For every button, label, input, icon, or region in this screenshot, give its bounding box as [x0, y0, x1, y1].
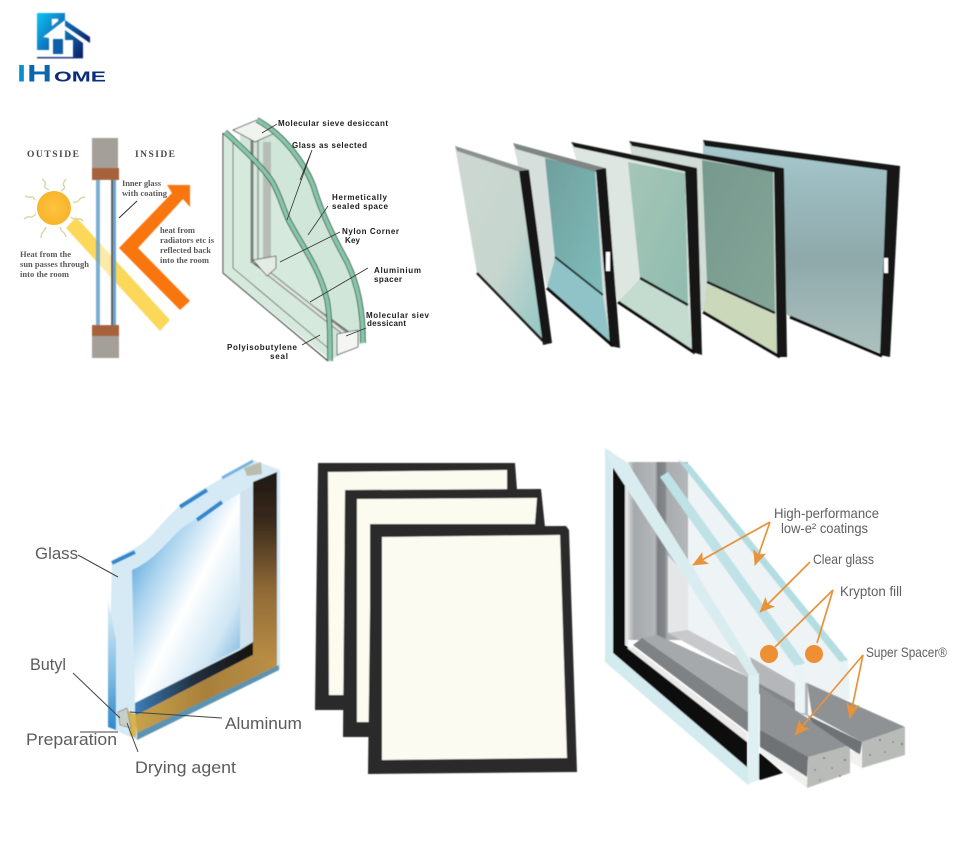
label: polyisobutylene seal: seal: [270, 352, 288, 361]
frame 3: [368, 526, 577, 774]
label: drying agent: Drying agent: [135, 758, 236, 777]
window illustration: [605, 448, 850, 785]
label: molecular sieve dessicant: dessicant: [367, 319, 406, 328]
glass unit 1: [455, 146, 552, 345]
logo wordmark: [17, 60, 106, 88]
labels: outside inside: [27, 150, 175, 160]
label: krypton fill: Krypton fill: [840, 583, 902, 599]
icon: sun: [24, 179, 85, 238]
label: super spacer: Super Spacer®: [866, 644, 948, 660]
reflected heat arrow: [119, 185, 190, 310]
panel: sealed unit cutaway: [223, 119, 444, 361]
glass unit 5: [703, 140, 900, 357]
panel: triple-pane window section: [605, 448, 948, 788]
label: nylon corner key: Nylon Corner: [342, 227, 399, 236]
glass block illustration: [108, 460, 280, 740]
window section: [92, 138, 119, 358]
text: inner glass: with coating: [122, 188, 168, 198]
leader lines: [73, 555, 222, 752]
label: clear glass: Clear glass: [813, 551, 874, 567]
label: molecular sieve desiccant: Molecular sieve desiccant: [278, 119, 388, 128]
panel: glass cross-section: [26, 460, 302, 777]
logo: IHome: [17, 13, 106, 88]
super spacers: [760, 683, 905, 788]
pointer lines: [262, 124, 368, 345]
callout arrows: [693, 522, 863, 735]
coating pointer: [119, 201, 137, 218]
glazing unit drawing: [223, 120, 363, 361]
text: inner glass: Inner glass: [122, 178, 162, 188]
logo wordmark: H: [27, 60, 52, 88]
text: sun heat: into the room: [20, 269, 69, 279]
panel: five insulated glass units: [455, 140, 900, 357]
text: sun heat: sun passes through: [20, 259, 89, 269]
labels: outside inside: INSIDE: [135, 150, 175, 160]
logo wordmark: OME: [54, 68, 106, 86]
label: hermetically sealed space: sealed space: [332, 202, 389, 211]
label: aluminium spacer: spacer: [374, 275, 402, 284]
label: molecular sieve dessicant: Molecular sieve: [366, 311, 435, 320]
label: polyisobutylene seal: Polyisobutylene: [227, 343, 298, 352]
glass unit 3: [571, 142, 702, 355]
text: radiators: reflected back: [160, 245, 211, 255]
label: preparation: Preparation: [26, 730, 117, 749]
label: coatings: High-performance: [774, 505, 879, 521]
text: radiators: heat from: [160, 225, 195, 235]
frame 1: [315, 463, 517, 710]
panel: heat reflection diagram: [20, 138, 215, 358]
label: hermetically sealed space: Hermetically: [332, 193, 388, 202]
label: glass: Glass: [35, 544, 78, 563]
text: radiators: into the room: [160, 255, 209, 265]
krypton dots: [760, 645, 823, 663]
text: radiators: radiators etc is: [160, 235, 215, 245]
text: sun heat: Heat from the: [20, 249, 71, 259]
label: aluminium spacer: Aluminium: [374, 266, 421, 275]
label: nylon corner key: Key: [345, 236, 361, 245]
frame 2: [343, 489, 545, 737]
logo wordmark: I: [17, 60, 26, 88]
labels: outside inside: OUTSIDE: [27, 150, 79, 160]
label: coatings: low-e² coatings: [781, 520, 868, 536]
label: aluminum: Aluminum: [225, 714, 302, 733]
label: glass as selected: Glass as selected: [292, 141, 367, 150]
glass unit 4: [629, 141, 787, 357]
sun rays heat beam: [66, 217, 170, 331]
icon: house: [37, 13, 90, 58]
label: butyl: Butyl: [30, 655, 66, 674]
panel: three framed glass panes: [315, 463, 577, 774]
glass unit 2: [513, 143, 620, 348]
